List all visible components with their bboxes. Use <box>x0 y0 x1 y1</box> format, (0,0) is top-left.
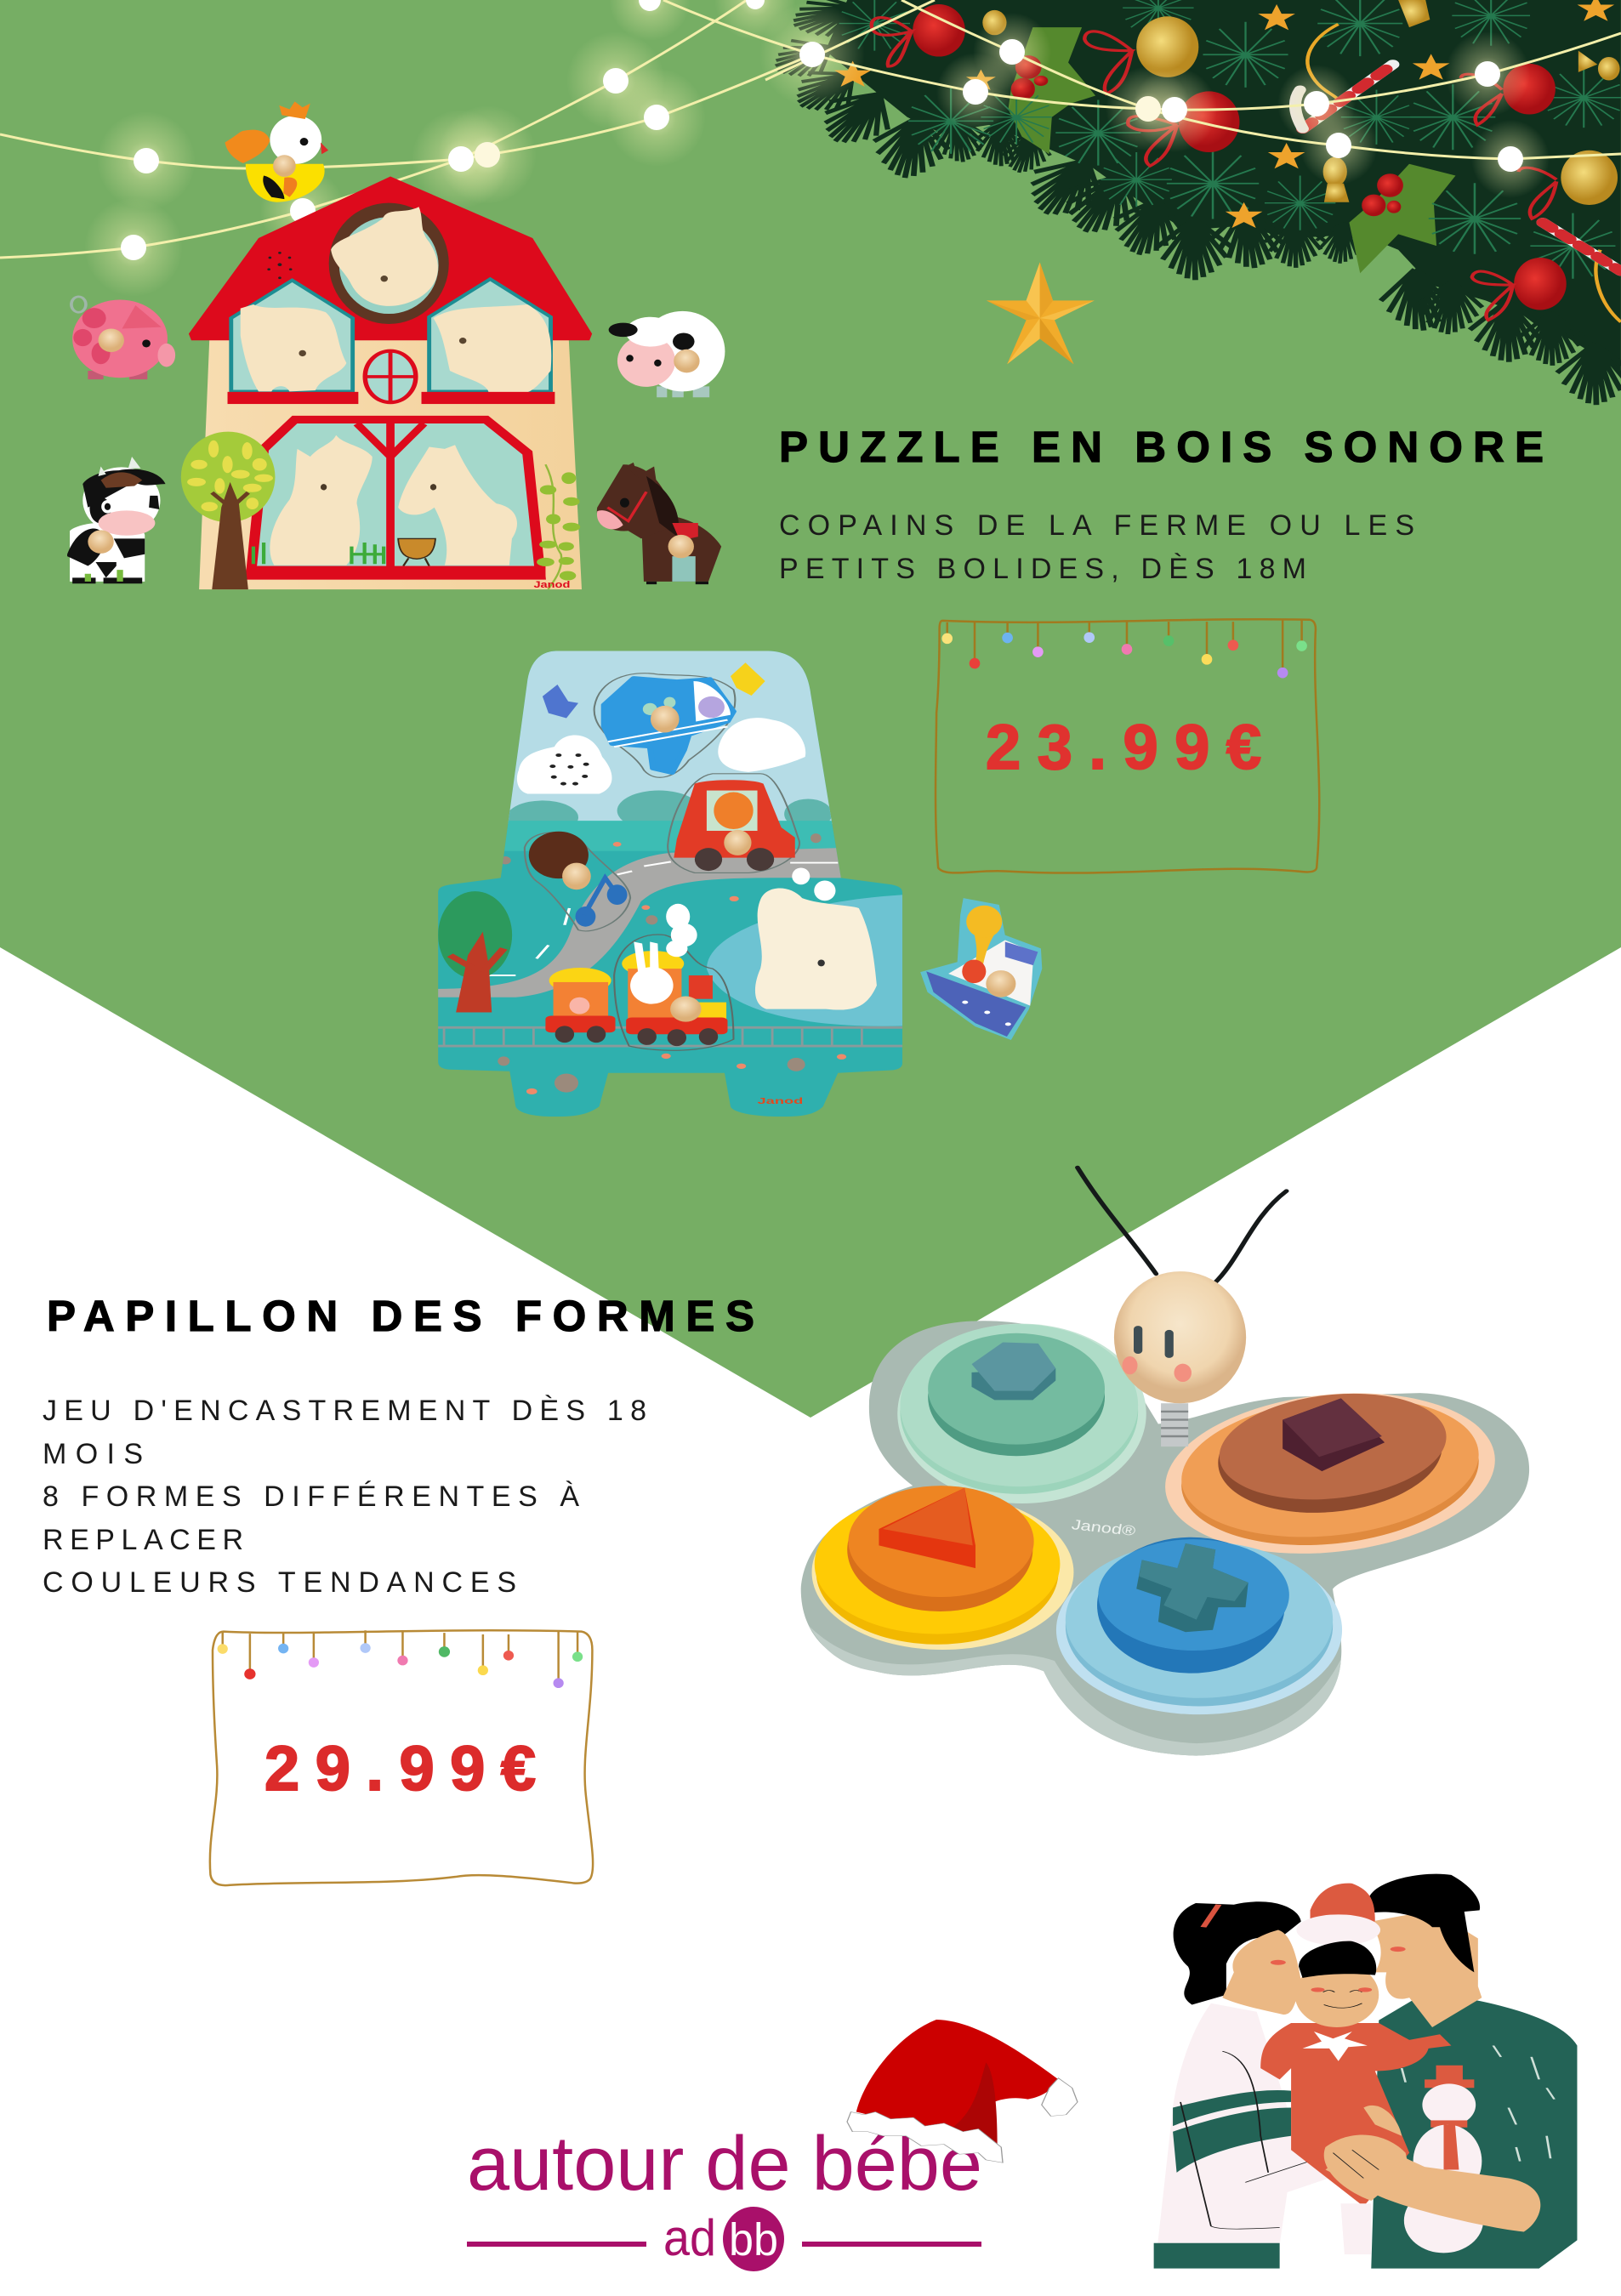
brand mark on car puzzle: Janod <box>758 1097 803 1106</box>
ribbons <box>872 18 1556 320</box>
wooden head <box>1114 1271 1246 1403</box>
orange petal <box>1148 1374 1512 1572</box>
price frame: farm and car puzzle <box>936 619 1319 873</box>
clouds <box>517 718 805 794</box>
steam puffs <box>666 868 835 957</box>
baby <box>1260 1941 1451 2254</box>
rocks <box>555 1073 578 1093</box>
plane piece <box>594 673 735 777</box>
description: puzzle text block: PETITS BOLIDES, DÈS 18M <box>779 553 1306 585</box>
farm wood body <box>199 339 582 589</box>
green petal <box>897 1324 1146 1503</box>
pig piece <box>71 297 175 379</box>
small speaker dots <box>267 252 293 279</box>
tracks <box>432 1027 903 1046</box>
candy canes <box>1295 65 1621 271</box>
description: papillon text block: REPLACER <box>43 1524 243 1556</box>
bear on bike piece <box>525 832 630 931</box>
string lights <box>0 0 1621 297</box>
antennae <box>1078 1168 1287 1284</box>
logo: autour de bébé: autour de bébé <box>467 2122 982 2207</box>
brand mark on butterfly: Janod® <box>1070 1518 1137 1539</box>
yellow petal <box>812 1486 1073 1650</box>
price frame: papillon: 29.99€ <box>264 1733 536 1804</box>
train engine piece <box>614 935 733 1050</box>
logo: autour de bébé: ad <box>663 2209 716 2266</box>
father sweater <box>1369 1874 1577 2269</box>
cow piece <box>67 457 166 583</box>
logo: autour de bébé: bb <box>729 2214 778 2265</box>
description: papillon text block: MOIS <box>43 1438 143 1470</box>
spring <box>1161 1403 1188 1446</box>
description: papillon text block: 8 FORMES DIFFÉRENTES À <box>43 1480 579 1513</box>
empty boat slot <box>755 888 877 1010</box>
hen piece <box>225 101 328 202</box>
logo: autour de bébé <box>467 2122 982 2271</box>
red car piece <box>668 774 799 872</box>
santa hat <box>847 2020 1078 2162</box>
brand mark on farm puzzle: Janod <box>533 579 570 589</box>
description: puzzle text block <box>779 509 1414 585</box>
title: papillon des formes: PAPILLON DES FORMES <box>47 1292 754 1340</box>
baby santa hat <box>1296 1884 1380 1946</box>
mother <box>1154 1901 1379 2269</box>
father's arm and hands <box>1324 2106 1540 2231</box>
blue petal <box>1056 1537 1342 1714</box>
train wagon <box>545 968 616 1043</box>
icon: large gold star <box>987 262 1095 364</box>
snowman <box>1404 2066 1483 2253</box>
water <box>707 895 903 1026</box>
right window with sheep slot <box>429 279 551 392</box>
description: puzzle text block: COPAINS DE LA FERME OU LES <box>779 509 1414 542</box>
round middle window <box>365 351 416 402</box>
description: papillon text block <box>43 1395 646 1599</box>
butterfly shape sorter product <box>801 1168 1529 1756</box>
title: puzzle en bois sonore: PUZZLE EN BOIS SONORE <box>779 423 1544 471</box>
sheep piece <box>609 311 725 397</box>
birds <box>543 662 765 719</box>
farm roof <box>189 176 592 340</box>
price frame: farm and car puzzle: 23.99€ <box>986 712 1261 782</box>
red baubles <box>913 4 1567 310</box>
tree <box>181 432 275 589</box>
left window with pig slot <box>231 281 353 391</box>
vine <box>537 464 580 589</box>
horse piece <box>597 463 721 584</box>
round attic window with chicken slot <box>329 203 449 324</box>
gold baubles <box>982 0 1620 205</box>
holly leaves <box>1008 27 1455 273</box>
family illustration <box>1154 1874 1577 2269</box>
boat giraffe piece <box>920 898 1042 1040</box>
barn door with cow and horse slots <box>251 419 540 576</box>
tree <box>438 891 512 979</box>
car puzzle product <box>432 646 1042 1123</box>
gold stars <box>834 0 1614 228</box>
road <box>432 848 850 997</box>
description: papillon text block: COULEURS TENDANCES <box>43 1566 516 1599</box>
farm puzzle product <box>67 101 725 589</box>
christmas garland <box>763 0 1621 405</box>
bushes <box>509 791 831 822</box>
price frame: papillon <box>210 1630 593 1885</box>
green chevron background <box>0 0 1621 1418</box>
description: papillon text block: JEU D'ENCASTREMENT DÈS 18 <box>43 1395 646 1427</box>
